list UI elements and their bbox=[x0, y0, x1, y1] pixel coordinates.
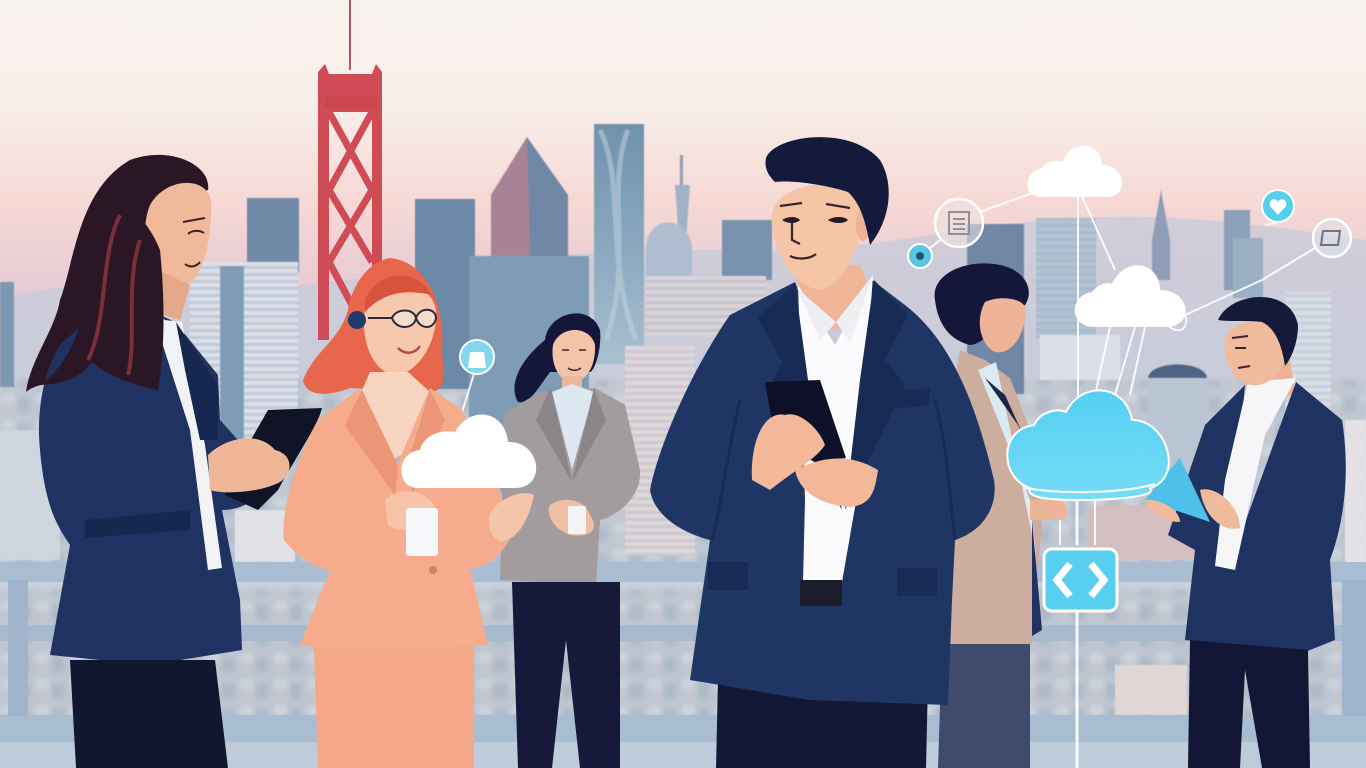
shirt bbox=[150, 305, 222, 570]
shirt bbox=[978, 362, 1036, 555]
hair bbox=[514, 313, 600, 402]
hair bbox=[765, 137, 889, 245]
hair bbox=[935, 263, 1029, 345]
button bbox=[429, 566, 437, 574]
red bridge tower bbox=[318, 0, 382, 340]
belt bbox=[800, 580, 842, 606]
icon: document circle bbox=[935, 199, 983, 247]
distant city texture bbox=[0, 380, 1366, 720]
hand bottom bbox=[795, 458, 878, 507]
lapels bbox=[536, 388, 606, 482]
tablet bbox=[225, 408, 322, 510]
distant hills bbox=[0, 217, 1366, 560]
cloud: upper white bbox=[1027, 146, 1122, 197]
face bbox=[980, 298, 1026, 352]
shirt bbox=[552, 384, 594, 470]
person: main man bbox=[650, 137, 995, 768]
face bbox=[1224, 320, 1288, 385]
lapels bbox=[345, 390, 445, 495]
trousers bbox=[70, 660, 228, 768]
hand right bbox=[489, 493, 534, 542]
ear bbox=[856, 209, 870, 241]
navy edge bbox=[1032, 520, 1042, 636]
icon: heart circle bbox=[1262, 190, 1294, 222]
person: red-haired woman bbox=[283, 258, 534, 768]
jacket bbox=[497, 388, 640, 585]
cloud: white foreground bbox=[401, 415, 536, 488]
sleeve shading bbox=[712, 400, 955, 540]
hand bbox=[1030, 500, 1068, 520]
terrace railing bbox=[0, 562, 1366, 768]
face bbox=[552, 330, 595, 382]
hand top bbox=[752, 414, 825, 490]
person: right man bbox=[1145, 297, 1346, 768]
collar bbox=[797, 275, 873, 342]
hand bbox=[208, 438, 290, 492]
jacket bbox=[39, 308, 266, 665]
face bbox=[364, 286, 436, 376]
lapel bbox=[176, 322, 218, 440]
icon: interface box bbox=[1044, 549, 1117, 611]
tie bbox=[985, 378, 1030, 450]
person: woman behind main man bbox=[925, 263, 1068, 768]
facial features bbox=[1232, 336, 1250, 368]
hand left with phone bbox=[385, 491, 436, 530]
hair bbox=[303, 258, 443, 394]
icon: small blue circle bbox=[460, 340, 494, 374]
hair bbox=[1218, 297, 1298, 366]
skirt bbox=[314, 646, 474, 768]
trousers bbox=[716, 680, 928, 768]
glasses bbox=[368, 310, 436, 327]
icon: frame circle bbox=[1313, 219, 1351, 257]
hair front bbox=[40, 200, 164, 390]
hair highlights bbox=[88, 215, 140, 375]
neck and blouse bbox=[360, 372, 430, 460]
trousers bbox=[938, 644, 1030, 768]
facial features bbox=[183, 218, 205, 266]
person: left woman bbox=[26, 155, 322, 768]
shirt bbox=[1215, 378, 1296, 570]
cloud: large blue bbox=[1007, 390, 1169, 500]
neck bbox=[562, 376, 582, 394]
cloud: middle white bbox=[1075, 265, 1186, 327]
tablet bbox=[765, 380, 846, 462]
neck bbox=[1245, 360, 1295, 412]
hair back bbox=[26, 155, 208, 392]
smile bbox=[398, 346, 420, 353]
jacket bbox=[283, 388, 515, 656]
lapels bbox=[758, 280, 908, 510]
hands and cup bbox=[549, 500, 594, 536]
jacket bbox=[925, 350, 1042, 646]
face bbox=[145, 183, 211, 288]
trousers bbox=[512, 582, 620, 768]
eyes bbox=[782, 217, 848, 223]
jacket bbox=[1168, 382, 1346, 652]
person: grey suit woman bbox=[497, 313, 640, 768]
neck bbox=[148, 265, 190, 320]
neck bbox=[795, 265, 874, 330]
hands bbox=[1145, 489, 1240, 529]
eyes, brows and mouth bbox=[780, 203, 850, 258]
hair fringe bbox=[365, 276, 432, 312]
skyline buildings bbox=[0, 124, 1366, 715]
facial features bbox=[562, 350, 586, 370]
headset bbox=[348, 311, 366, 329]
face bbox=[772, 184, 862, 290]
connection lines bbox=[462, 192, 1315, 768]
trousers bbox=[1188, 640, 1310, 768]
jacket bbox=[650, 280, 995, 705]
shirt bbox=[798, 275, 873, 582]
icon: small phone circle bbox=[908, 244, 932, 268]
tablet bbox=[1145, 458, 1210, 522]
pocket bbox=[85, 510, 190, 538]
pockets bbox=[708, 388, 937, 596]
